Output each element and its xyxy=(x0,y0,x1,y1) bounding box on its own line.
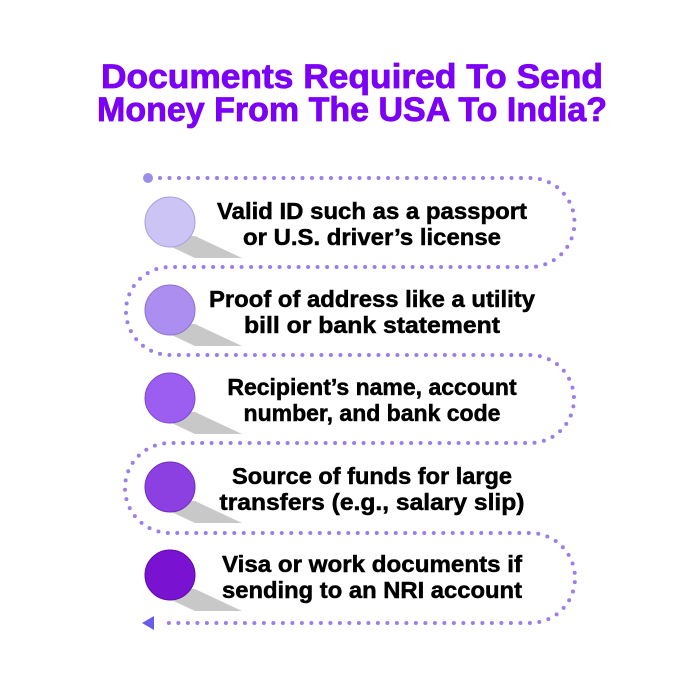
item 1 xyxy=(145,197,527,258)
title: Documents Required To Send xyxy=(101,58,603,96)
item 3: Recipient’s name, account xyxy=(227,374,517,400)
start dot xyxy=(143,173,153,183)
arrow head xyxy=(142,616,154,630)
item 2: Proof of address like a utility xyxy=(209,286,535,312)
item 4: transfers (e.g., salary slip) xyxy=(220,489,524,515)
item 5 xyxy=(145,550,522,611)
item 4 xyxy=(145,462,524,523)
item 5: Visa or work documents if xyxy=(222,551,522,577)
item 2 xyxy=(145,285,535,346)
item 3 xyxy=(145,373,517,434)
item 5: sending to an NRI account xyxy=(222,577,522,603)
item 3: number, and bank code xyxy=(244,400,500,426)
dotted path xyxy=(125,178,575,623)
title xyxy=(97,58,607,129)
item 1: or U.S. driver’s license xyxy=(243,224,501,250)
item 2: bill or bank statement xyxy=(244,312,500,338)
title: Money From The USA To India? xyxy=(97,91,607,129)
item 4: Source of funds for large xyxy=(232,463,512,489)
item 1: Valid ID such as a passport xyxy=(217,198,527,224)
